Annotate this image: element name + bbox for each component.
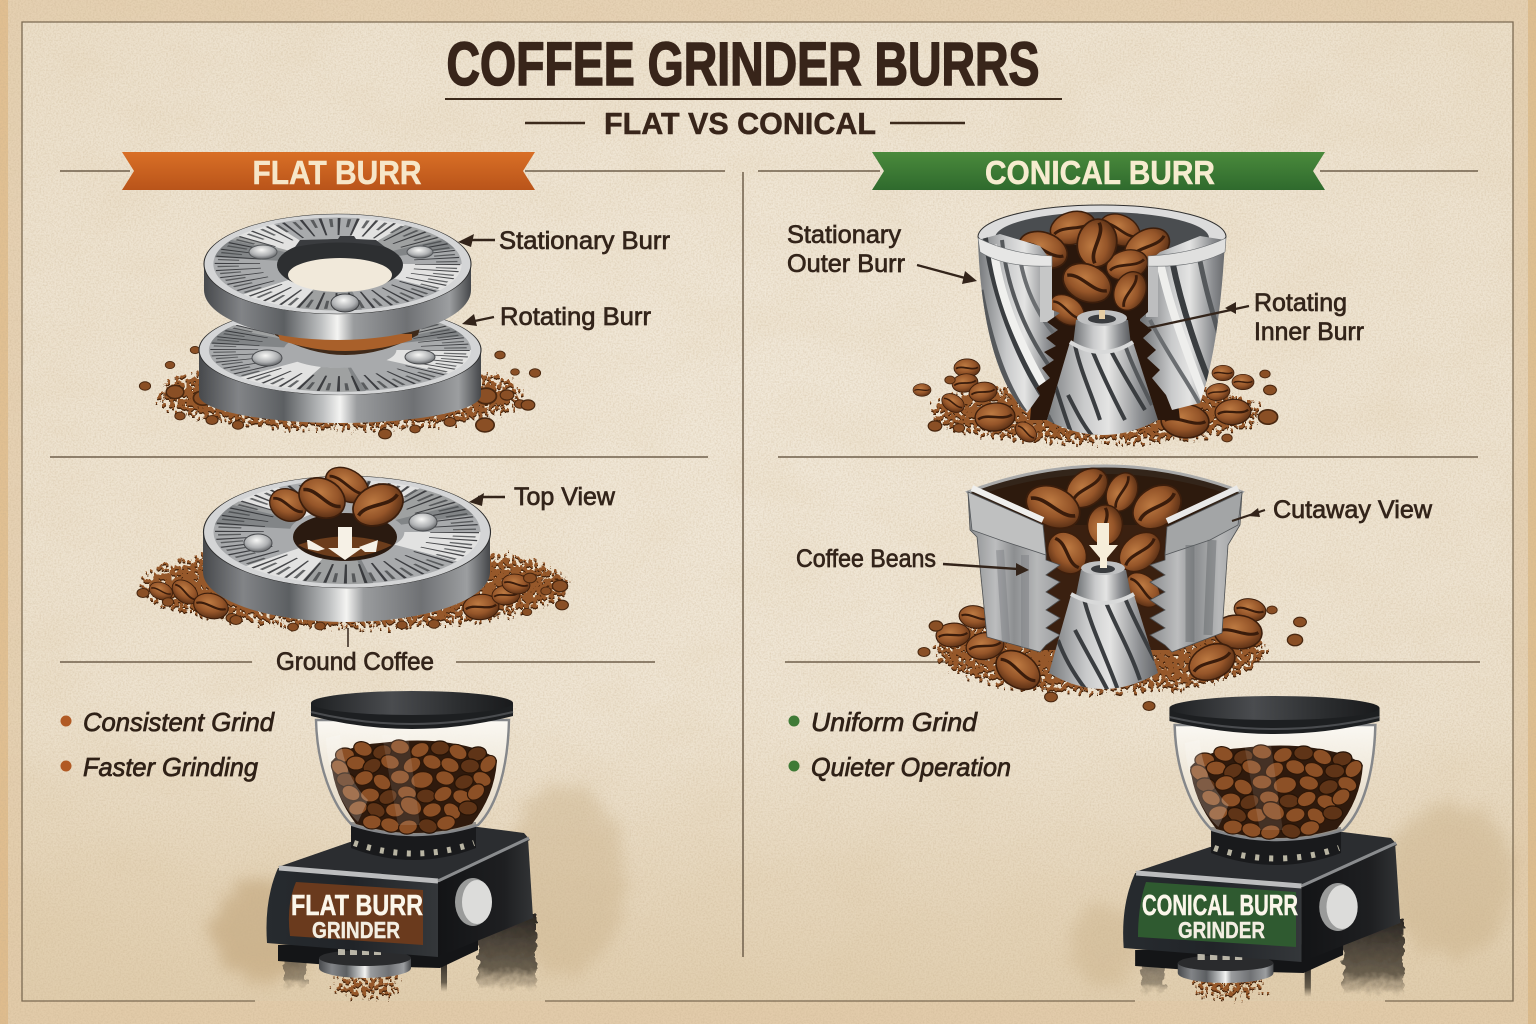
label: top view <box>469 483 616 511</box>
label: cutaway view: Cutaway View <box>1273 496 1433 524</box>
label: rotating burr: Rotating Burr <box>500 303 651 331</box>
label: ground coffee: Ground Coffee <box>276 648 434 676</box>
illustration: conical burr assembly <box>913 205 1278 446</box>
grinder label: conical burr: GRINDER <box>1178 917 1265 943</box>
label: stationary outer burr <box>787 221 977 284</box>
section divider lines <box>50 171 1480 957</box>
grinder label: flat burr: GRINDER <box>312 917 400 943</box>
illustration: conical burr cutaway <box>918 460 1306 710</box>
benefits list: flat burr <box>60 707 276 782</box>
illustration: flat burr grinder <box>266 691 536 1001</box>
label: stationary outer burr: Outer Burr <box>787 250 905 278</box>
banner: flat burr: FLAT BURR <box>252 154 422 191</box>
illustration: conical burr grinder <box>1123 696 1403 1001</box>
label: top view: Top View <box>514 483 616 511</box>
subtitle: FLAT VS CONICAL <box>604 106 876 141</box>
banner: flat burr <box>122 152 535 191</box>
illustration: stacked flat burrs <box>139 214 541 439</box>
benefits list: flat burr: Faster Grinding <box>83 752 259 782</box>
grinder label: conical burr: CONICAL BURR <box>1142 890 1298 922</box>
label: rotating inner burr: Inner Burr <box>1254 318 1364 346</box>
benefits list: conical burr: Quieter Operation <box>811 752 1011 782</box>
label: rotating inner burr <box>1148 289 1364 346</box>
banner: conical burr: CONICAL BURR <box>985 154 1215 191</box>
title: COFFEE GRINDER BURRS <box>446 30 1040 98</box>
panel: flat burr <box>60 152 670 1001</box>
benefits list: conical burr: Uniform Grind <box>811 707 979 737</box>
grinder label: flat burr: FLAT BURR <box>291 890 423 922</box>
banner: conical burr <box>872 152 1325 191</box>
panel: conical burr <box>787 152 1433 1001</box>
benefits list: conical burr <box>788 707 1011 782</box>
illustration: flat burr top view <box>130 460 580 631</box>
label: coffee beans: Coffee Beans <box>796 545 936 573</box>
label: stationary outer burr: Stationary <box>787 221 902 249</box>
grinder label: conical burr <box>1142 890 1298 943</box>
benefits list: flat burr: Consistent Grind <box>83 707 276 737</box>
label: rotating inner burr: Rotating <box>1254 289 1347 317</box>
label: stationary burr: Stationary Burr <box>499 227 670 255</box>
grinder label: flat burr <box>291 890 423 943</box>
label: coffee beans <box>796 545 1029 576</box>
